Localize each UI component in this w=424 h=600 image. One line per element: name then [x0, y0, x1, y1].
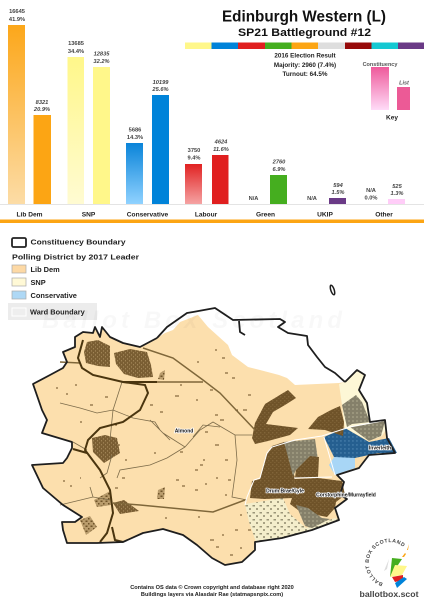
map legend: SNP: [30, 278, 46, 287]
Other bar: 525: [392, 184, 403, 190]
housing: Newbridge and Ratho: [113, 500, 139, 514]
credits: Contains OS data © Crown copyright and database right 2020: [130, 584, 294, 591]
ward boundaries: [245, 420, 387, 505]
party colour strip: [185, 42, 424, 49]
Other bar: N/A: [366, 188, 376, 194]
UKIP bar: 594: [333, 183, 344, 189]
housing: Dalmeny: [114, 349, 153, 378]
logo map of Scotland: [384, 544, 409, 588]
SNP bars: 34.4%: [68, 49, 84, 55]
SNP bars: 13685: [68, 41, 84, 47]
Labour bars: 11.6%: [213, 147, 229, 153]
UKIP bar: N/A: [307, 196, 317, 202]
housing: Drum Brae / Gyle: [250, 442, 295, 499]
2016 election result: Turnout: 64.5%: [282, 71, 328, 78]
map legend: Conservative: [30, 291, 77, 300]
Conservative bars: 5686: [129, 128, 141, 134]
Labour bars: 4624: [214, 140, 228, 146]
minor boundaries and tracks: [60, 382, 252, 505]
ward labels: [175, 429, 391, 499]
Labour bars: 9.4%: [188, 156, 200, 162]
constituency boundary: south and west: [32, 327, 395, 565]
Labour bars: 3750: [188, 148, 200, 154]
ward labels: Inverleith: [369, 446, 391, 452]
Lib Dem swatch: [12, 265, 26, 273]
constituency boundary swatch: [12, 238, 26, 247]
Other bar: [365, 184, 405, 204]
logo: Ballot Box Scotland: [360, 538, 419, 599]
2016 election result: [274, 52, 337, 78]
housing: Kirkliston: [92, 435, 120, 463]
bar chart: votes by party: [0, 9, 424, 218]
key: Key: [386, 114, 398, 121]
Green bar: 2760: [272, 160, 286, 166]
Labour bars: [185, 140, 229, 204]
ward boundary swatch: [8, 303, 97, 320]
Lib Dem bars: 8321: [36, 100, 48, 106]
SNP district south-east: [245, 498, 339, 542]
constituency map: [32, 285, 397, 565]
Other bar: 0.0%: [365, 196, 377, 202]
watermark: Ballot Box Scotland: [42, 307, 343, 334]
Lib Dem bars: 16645: [9, 9, 25, 15]
chart baseline: [0, 203, 424, 206]
map legend: Constituency Boundary: [30, 238, 127, 246]
SNP bars: 12835: [94, 52, 110, 58]
Lib Dem bars: [8, 9, 51, 204]
Green bar: [249, 160, 287, 204]
SNP bars: [68, 41, 110, 204]
A-roads: [60, 348, 255, 512]
map legend: Polling District by 2017 Leader: [12, 252, 139, 262]
credits: Buildings layers via Alasdair Rae (statmapsnpix.com): [141, 592, 283, 598]
housing: central brown block: [295, 456, 319, 478]
party labels: Labour: [195, 211, 218, 218]
party labels: Green: [256, 211, 275, 218]
map legend: Ward Boundary: [30, 308, 86, 316]
ward labels: Almond: [175, 429, 193, 435]
Green bar: 6.9%: [273, 167, 285, 173]
constituency boundary: Forth coast: [157, 308, 345, 382]
UKIP bar: 1.5%: [332, 190, 344, 196]
Conservative swatch: [12, 291, 26, 299]
SNP swatch: [12, 278, 26, 286]
ward labels: Corstorphine/Murrayfield: [316, 493, 376, 499]
party labels: UKIP: [317, 211, 333, 218]
ward labels: Drum Brae/Gyle: [266, 489, 304, 495]
key: List: [399, 80, 410, 86]
housing: sparse western villages: [80, 370, 165, 535]
Lib Dem bars: 41.9%: [9, 17, 25, 23]
housing: SNP grey block: [284, 439, 318, 476]
land: Lib Dem polling districts: [32, 315, 395, 565]
Lib Dem bars: 20.9%: [33, 107, 50, 113]
Conservative bars: 10199: [153, 80, 169, 86]
2016 election result: 2016 Election Result: [274, 52, 337, 59]
housing: Clermiston east: [308, 406, 344, 436]
housing: South Queensferry: [84, 340, 110, 367]
SNP housing north-east: [342, 395, 385, 441]
party labels: Lib Dem: [16, 211, 43, 218]
party labels: Other: [375, 211, 393, 218]
party labels: Conservative: [127, 211, 169, 218]
logo wordmark: ballotbox.scot: [360, 589, 419, 599]
title: Edinburgh Western (L): [222, 8, 386, 26]
party labels: [16, 211, 393, 218]
map legend: Lib Dem: [30, 265, 60, 274]
housing: Corstorphine: [290, 478, 345, 517]
subtitle: SP21 Battleground #12: [238, 27, 371, 39]
UKIP bar: [307, 183, 346, 204]
housing: grey Corstorphine patch: [296, 505, 330, 528]
scattered rural buildings: [56, 350, 251, 555]
key: [363, 62, 410, 121]
map legend: [8, 238, 139, 320]
Other bar: 1.3%: [391, 191, 403, 197]
Conservative bars: 25.6%: [151, 87, 169, 93]
Green bar: N/A: [249, 196, 258, 202]
2016 election result: Majority: 2960 (7.4%): [274, 62, 336, 69]
island: [329, 285, 336, 295]
Conservative bars: 14.3%: [127, 135, 143, 141]
SNP district north-east: [339, 370, 387, 441]
housing: Drum Brae north: [252, 390, 298, 444]
key: Constituency: [363, 62, 398, 68]
orange divider strip: [0, 220, 424, 223]
Conservative light blue district: [329, 452, 395, 475]
Conservative Inverleith housing: [324, 428, 397, 458]
motorways: [73, 340, 157, 542]
credits: [130, 584, 294, 598]
logo ring text: BALLOT BOX SCOTLAND: [365, 538, 404, 586]
SNP bars: 32.2%: [93, 59, 110, 65]
Conservative bars: [126, 80, 169, 204]
party labels: SNP: [82, 211, 96, 218]
